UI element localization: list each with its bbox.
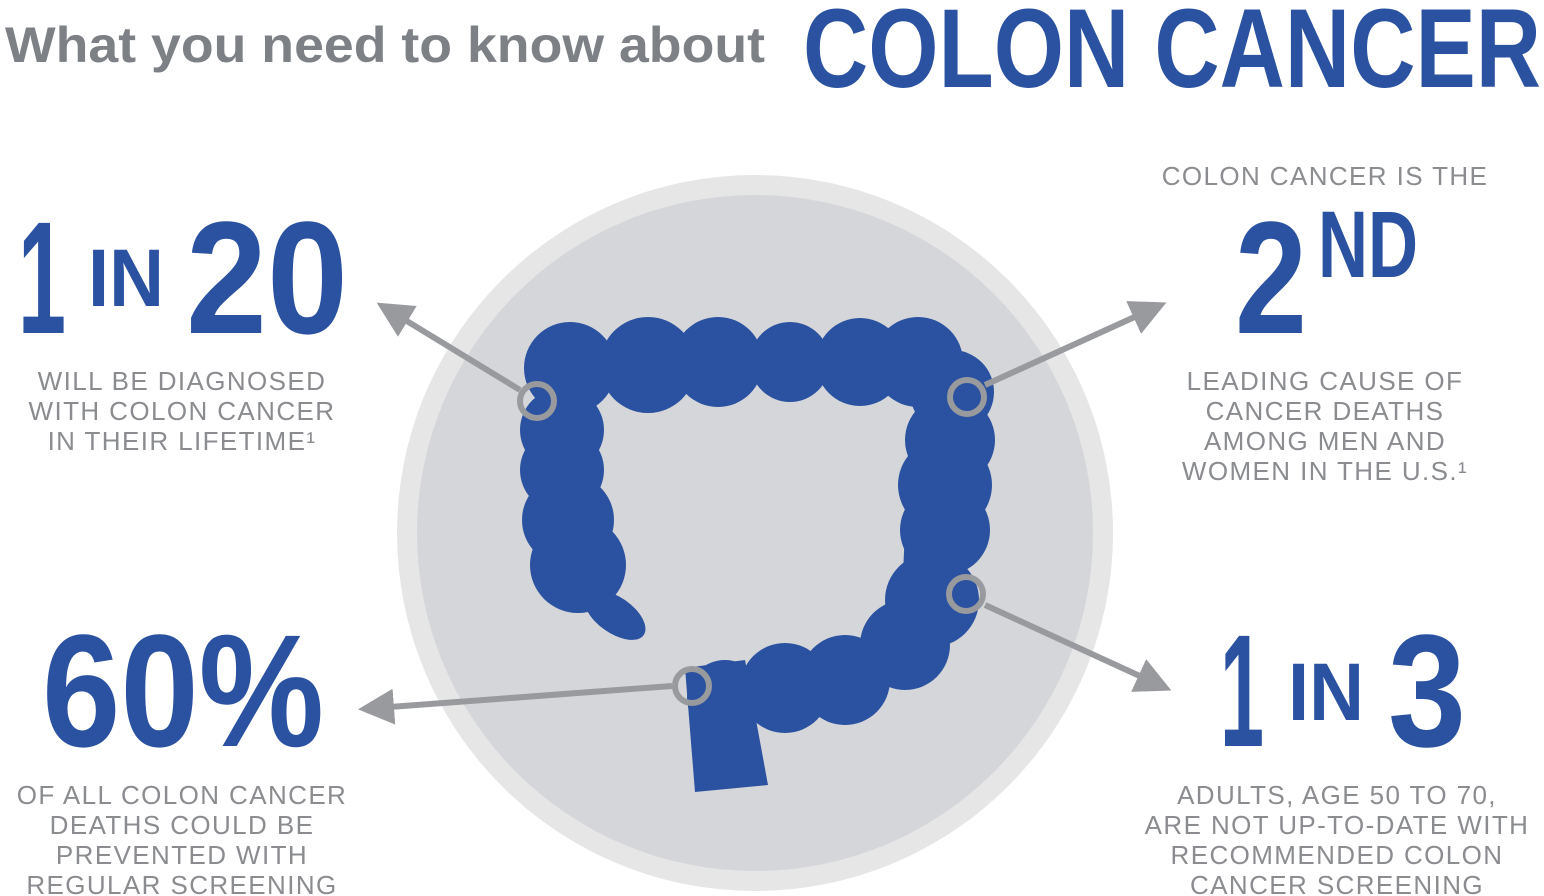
stat: 60%: 60% <box>42 601 324 780</box>
title: What you need to know about <box>5 17 765 73</box>
stat: 1 in 20: WITH COLON CANCER <box>29 396 335 426</box>
title <box>5 0 1541 111</box>
stat: 2nd: COLON CANCER IS THE <box>1162 161 1488 191</box>
stat: 60%: PREVENTED WITH <box>56 840 308 870</box>
stat: 1 in 3 <box>1145 601 1529 896</box>
stat: 1 in 3: 3 <box>1388 601 1466 780</box>
stat: 1 in 20 <box>18 188 348 456</box>
stat: 1 in 3: ARE NOT UP-TO-DATE WITH <box>1145 810 1529 840</box>
stat: 2nd: LEADING CAUSE OF <box>1187 366 1463 396</box>
stat: 2nd: CANCER DEATHS <box>1206 396 1444 426</box>
arrows <box>376 310 1155 708</box>
stat: 1 in 20: 1 <box>18 188 66 367</box>
colon illustration <box>520 317 995 792</box>
stat: 1 in 3: RECOMMENDED COLON <box>1171 840 1503 870</box>
stat: 60% <box>17 601 347 896</box>
stat: 1 in 20: IN THEIR LIFETIME¹ <box>48 426 316 456</box>
stat: 1 in 3: IN <box>1288 647 1364 738</box>
stat: 2nd: WOMEN IN THE U.S.¹ <box>1182 456 1468 486</box>
stat: 1 in 20: WILL BE DIAGNOSED <box>38 366 326 396</box>
stat: 1 in 20: 20 <box>186 188 348 367</box>
stat: 2nd: AMONG MEN AND <box>1204 426 1446 456</box>
central circle <box>397 175 1113 891</box>
stat: 60%: OF ALL COLON CANCER <box>17 780 347 810</box>
stat: 1 in 3: ADULTS, AGE 50 TO 70, <box>1177 780 1497 810</box>
stat: 2nd: ND <box>1318 192 1418 298</box>
stat: 60%: DEATHS COULD BE <box>50 810 314 840</box>
stat: 2nd: 2 <box>1235 188 1307 367</box>
stat: 1 in 3: 1 <box>1220 601 1264 780</box>
stat: 1 in 20: IN <box>88 233 164 324</box>
stat: 2nd <box>1162 161 1488 486</box>
